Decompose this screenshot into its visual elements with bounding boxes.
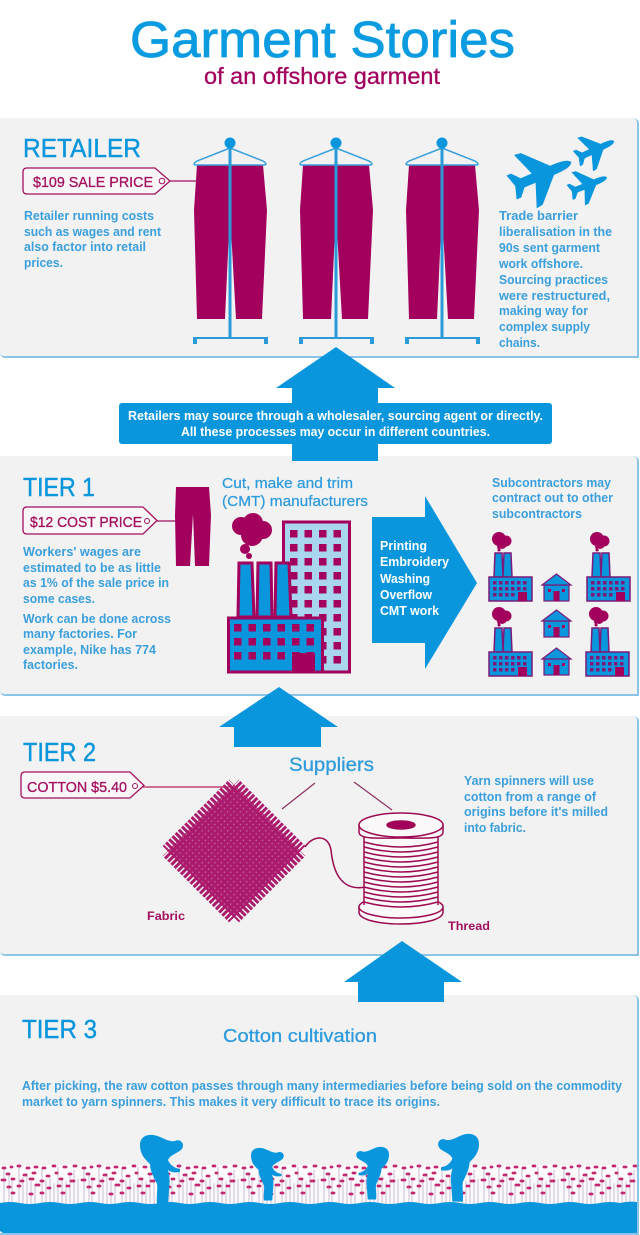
icon: thread spool (359, 813, 443, 924)
text: raw cotton: market to yarn spinners. This makes it very difficult to trace its origins. (22, 1095, 440, 1109)
panel: tier 3 (0, 995, 639, 1235)
callout: sourcing (119, 403, 552, 444)
price tag: cost price (23, 507, 177, 534)
arrow: tier 2 to tier 3 (344, 941, 462, 1002)
arrow: processes: CMT work (380, 604, 439, 618)
price tag: sale price: $109 SALE PRICE (33, 174, 153, 191)
text: retailer running costs: Retailer running costs (24, 209, 154, 223)
text: subcontractors: subcontractors (492, 507, 582, 521)
connector lines (282, 782, 392, 810)
icon: cotton picker 2 (251, 1148, 284, 1200)
icon: cotton picker 3 (356, 1147, 389, 1199)
text: workers wages: estimated to be as little (23, 561, 161, 575)
text: retailer running costs: such as wages and rent (24, 225, 162, 239)
text: trade barrier liberalisation: Sourcing practices (499, 273, 608, 287)
text: retailer running costs: also factor into retail (24, 240, 146, 254)
text: workers wages: many factories. For (23, 627, 137, 641)
icon: small trousers (175, 487, 211, 566)
text: trade barrier liberalisation: liberalisation in the (499, 225, 612, 239)
title: of an offshore garment (204, 63, 441, 89)
icon: fabric swatch (158, 775, 310, 927)
label: thread: Thread (448, 919, 490, 933)
text: workers wages: Workers' wages are (23, 545, 141, 559)
text: trade barrier liberalisation: making way for (499, 304, 588, 318)
arrow: processes: Printing (380, 539, 427, 553)
heading: CMT manufacturers: Cut, make and trim (222, 475, 353, 492)
panel: tier 1 (0, 456, 639, 696)
text: workers wages: Work can be done across (23, 612, 171, 626)
heading: tier 2: TIER 2 (23, 737, 96, 767)
ground (0, 1202, 637, 1233)
text: workers wages: as 1% of the sale price in (23, 576, 169, 590)
text: subcontractors: contract out to other (492, 491, 613, 505)
text: yarn spinners (464, 774, 608, 835)
text: workers wages: example, Nike has 774 (23, 643, 156, 657)
clothes rack 1 with trousers (193, 138, 268, 344)
text: trade barrier liberalisation (498, 209, 612, 350)
icon: large factory (228, 513, 350, 673)
arrow: processes: Washing (380, 572, 430, 586)
text: trade barrier liberalisation: 90s sent garment (499, 241, 601, 255)
icons: small factories and houses (489, 532, 630, 676)
text: trade barrier liberalisation: Trade barrier (499, 209, 578, 223)
price tag: sale price (23, 168, 198, 194)
text: subcontractors: Subcontractors may (492, 476, 611, 490)
arrow: processes (372, 496, 477, 669)
price tag: cotton (21, 772, 230, 798)
label: fabric: Fabric (147, 909, 185, 923)
text: subcontractors (492, 476, 613, 521)
heading: cotton cultivation: Cotton cultivation (223, 1026, 377, 1046)
text: retailer running costs (24, 209, 162, 270)
price tag: cotton: COTTON $5.40 (27, 779, 127, 796)
thread strand (305, 838, 366, 888)
icon: cotton picker 4 (438, 1134, 479, 1202)
text: trade barrier liberalisation: complex supply (499, 320, 590, 334)
heading: tier 3: TIER 3 (22, 1014, 97, 1044)
text: yarn spinners: Yarn spinners will use (464, 774, 594, 788)
callout: sourcing: Retailers may source through a wholesaler, sourcing agent or directly. (128, 409, 543, 423)
arrow: processes: Overflow (380, 588, 432, 602)
arrow: tier 1 to tier 2 (219, 687, 338, 747)
clothes rack 3 with trousers (405, 138, 480, 344)
text: workers wages: some cases. (23, 592, 95, 606)
price tag: cost price: $12 COST PRICE (30, 514, 142, 531)
text: yarn spinners: cotton from a range of (464, 790, 597, 804)
arrow: retailer to tier 1 (276, 347, 395, 461)
cotton field (0, 1163, 637, 1204)
icon: cotton picker 1 (140, 1135, 183, 1204)
title: Garment Stories (130, 11, 515, 68)
text: retailer running costs: prices. (24, 256, 63, 270)
text: yarn spinners: origins before it's milled (464, 805, 608, 819)
text: workers wages (23, 545, 171, 672)
text: trade barrier liberalisation: work offshore. (498, 257, 583, 271)
heading: suppliers: Suppliers (289, 755, 374, 776)
heading: tier 1: TIER 1 (23, 472, 95, 502)
panel: retailer (0, 118, 639, 358)
arrow: processes: Embroidery (380, 555, 449, 569)
text: raw cotton: After picking, the raw cotton passes through many intermediaries before being sold on the commodity (22, 1079, 622, 1093)
icon: aeroplanes (500, 124, 622, 214)
text: yarn spinners: into fabric. (464, 821, 526, 835)
text: raw cotton (22, 1079, 622, 1109)
clothes rack 2 with trousers (299, 138, 374, 344)
text: trade barrier liberalisation: were restructured, (498, 289, 610, 303)
heading: CMT manufacturers: (CMT) manufacturers (222, 493, 368, 510)
text: trade barrier liberalisation: chains. (499, 336, 540, 350)
text: workers wages: factories. (23, 658, 78, 672)
heading: CMT manufacturers (222, 475, 368, 510)
panel: tier 2 (0, 716, 639, 956)
callout: sourcing: All these processes may occur in different countries. (181, 425, 490, 439)
heading: retailer: RETAILER (23, 133, 141, 163)
